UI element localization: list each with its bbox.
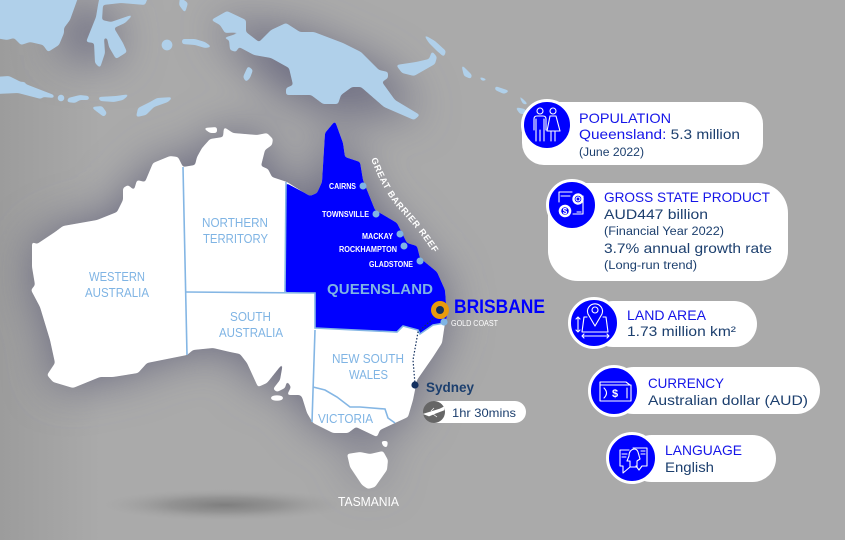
city: Rockhampton: ROCKHAMPTON [339,245,397,254]
state label: Victoria: VICTORIA [318,412,374,426]
state label: South Australia: AUSTRALIA [219,326,284,340]
icon: people [522,100,572,150]
label: Sydney: Sydney [426,379,474,395]
panel: gross state product [548,180,788,281]
icon: banknote [590,366,638,416]
heading: CURRENCY [648,375,725,391]
icon: banknote: $ [612,388,618,400]
state borders [183,167,445,423]
marker: Sydney [411,381,419,389]
state label: Northern Territory [202,216,269,246]
value: 1.73 million km² [627,323,736,339]
growth rate: 3.7% annual growth rate [604,240,772,256]
flight time pill [423,401,526,423]
route: Brisbane to Sydney [413,314,438,384]
panel: land area [570,298,757,348]
state label: Western Australia: AUSTRALIA [85,286,150,300]
Queensland state [285,121,447,334]
icon: plane [423,401,445,423]
trend note: (Long-run trend) [604,260,697,272]
state label: New South Wales [332,352,404,382]
marker: Brisbane [431,301,449,319]
state label: New South Wales: NEW SOUTH [332,352,404,366]
panel: language [608,434,776,482]
label: Brisbane: BRISBANE [454,296,545,318]
panel: currency [590,366,820,416]
state label: Northern Territory: NORTHERN [202,216,268,230]
period: (Financial Year 2022) [604,226,724,238]
value: AUD447 billion [604,206,708,222]
state label: Western Australia [85,270,150,300]
icon: gears [548,180,596,230]
state label: Queensland: QUEENSLAND [327,281,433,298]
state label: Western Australia: WESTERN [89,270,145,284]
state label: Tasmania: TASMANIA [338,495,400,509]
icon: gears: $ [563,207,568,216]
city: Gladstone: GLADSTONE [369,260,414,269]
city: Cairns: CAIRNS [329,182,357,191]
icon: speech bubbles [608,434,656,482]
state label: Northern Territory: TERRITORY [203,232,269,246]
city: Townsville: TOWNSVILLE [322,210,370,219]
city: Gold Coast: GOLD COAST [451,319,498,328]
heading: POPULATION [579,110,671,126]
heading: LAND AREA [627,307,707,323]
ground shadow [100,489,350,521]
value: Australian dollar (AUD) [648,392,808,408]
city: Mackay: MACKAY [362,232,394,241]
state label: South Australia [219,310,284,340]
map shadow glow [31,10,447,489]
date: (June 2022) [579,147,644,159]
flight time: 1hr 30mins [452,406,516,420]
state label: South Australia: SOUTH [230,310,271,324]
panel: population [522,100,763,165]
value: English [665,459,714,475]
state label: New South Wales: WALES [349,368,388,382]
mainland and islands [31,121,447,489]
islands north of Australia [0,0,529,120]
heading: GROSS STATE PRODUCT [604,189,770,205]
Great Barrier Reef label: GREAT BARRIER REEF [372,158,439,252]
icon: map pin [570,298,618,348]
population value: Queensland: 5.3 million [579,126,740,142]
map of Australia [31,121,447,489]
heading: LANGUAGE [665,442,742,458]
